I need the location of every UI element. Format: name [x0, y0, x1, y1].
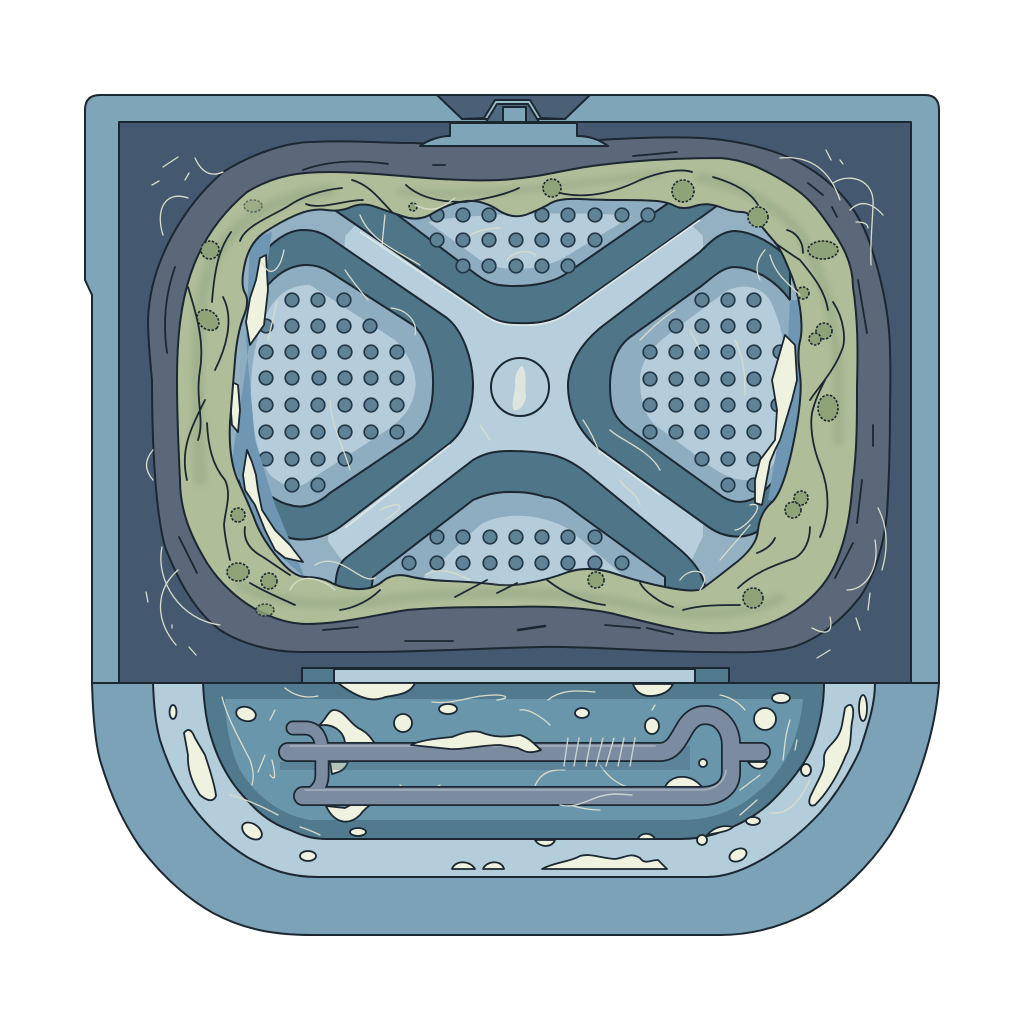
door gasket — [148, 137, 890, 652]
drum panel: right — [568, 231, 800, 537]
drum perforations: bottom — [402, 530, 629, 570]
drum highlights — [345, 220, 700, 528]
scum on the drum edge — [228, 255, 797, 562]
light X frame — [333, 216, 698, 556]
scum stuck on heater — [411, 731, 541, 752]
bottom strip — [302, 668, 729, 683]
drum panel: left — [240, 230, 473, 540]
drum panel: top — [320, 190, 725, 323]
mildew fold lines — [185, 170, 844, 610]
lint fibers on the well — [222, 688, 810, 835]
drum perforations: top — [430, 208, 655, 273]
top hinge notch — [420, 95, 608, 146]
lower well — [203, 683, 824, 839]
drum base — [177, 158, 858, 633]
lower light ring — [153, 683, 875, 877]
blue crack left — [232, 232, 305, 578]
mildew darker shading — [197, 174, 839, 614]
hair wrapped on heater — [560, 738, 635, 806]
soap scum in lower well — [170, 683, 867, 869]
drum perforations: left — [259, 293, 404, 492]
dark inner panel — [119, 122, 911, 683]
center hub — [491, 358, 549, 416]
green mildew ring — [177, 158, 858, 633]
mold spots — [193, 179, 838, 616]
machine top frame — [85, 95, 939, 683]
gasket crease lines — [165, 152, 873, 641]
blue crack right — [768, 300, 805, 505]
lint fibers on panel and drum — [146, 150, 886, 658]
lower tub body — [92, 683, 939, 935]
drum perforations: right — [643, 293, 787, 492]
well water — [225, 699, 803, 820]
heating element — [280, 715, 761, 796]
drum panel: bottom — [335, 451, 708, 600]
